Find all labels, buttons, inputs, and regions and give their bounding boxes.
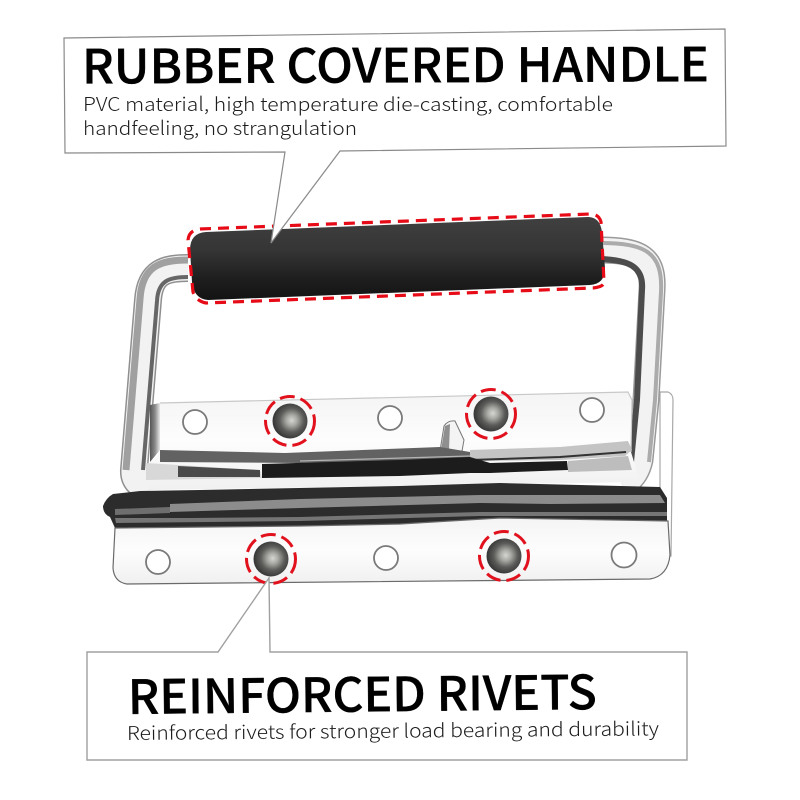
callout box with pointer [64,29,726,243]
rubber grip [190,217,605,300]
back plate edge [660,392,673,556]
description: rubber handle: PVC material, high temperature die-casting, comfortable [83,90,613,117]
hinge fold [103,441,667,528]
heading: reinforced rivets: REINFORCED RIVETS [127,654,597,728]
wire handle bail [126,243,661,489]
callout box with pointer [87,578,687,760]
upper plate slot tab [440,421,464,451]
callout: reinforced rivets [87,578,687,760]
slot shadow [441,424,450,450]
rivets [254,396,522,576]
red dashed highlights: rivets [246,390,528,584]
red dashed highlight: grip [188,214,604,303]
mounting holes [146,398,636,574]
heading: rubber covered handle: RUBBER COVERED HANDLE [82,26,709,97]
callout: rubber covered handle [64,26,726,243]
upper plate left fold [150,403,160,462]
lower mounting plate [113,518,670,584]
product: spring-loaded chest handle [103,214,673,584]
upper plate top edge [160,392,632,452]
description: rubber handle: handfeeling, no strangulation [83,114,357,141]
upper mounting plate [150,392,640,490]
description: reinforced rivets: Reinforced rivets for stronger load bearing and durability [127,714,660,746]
